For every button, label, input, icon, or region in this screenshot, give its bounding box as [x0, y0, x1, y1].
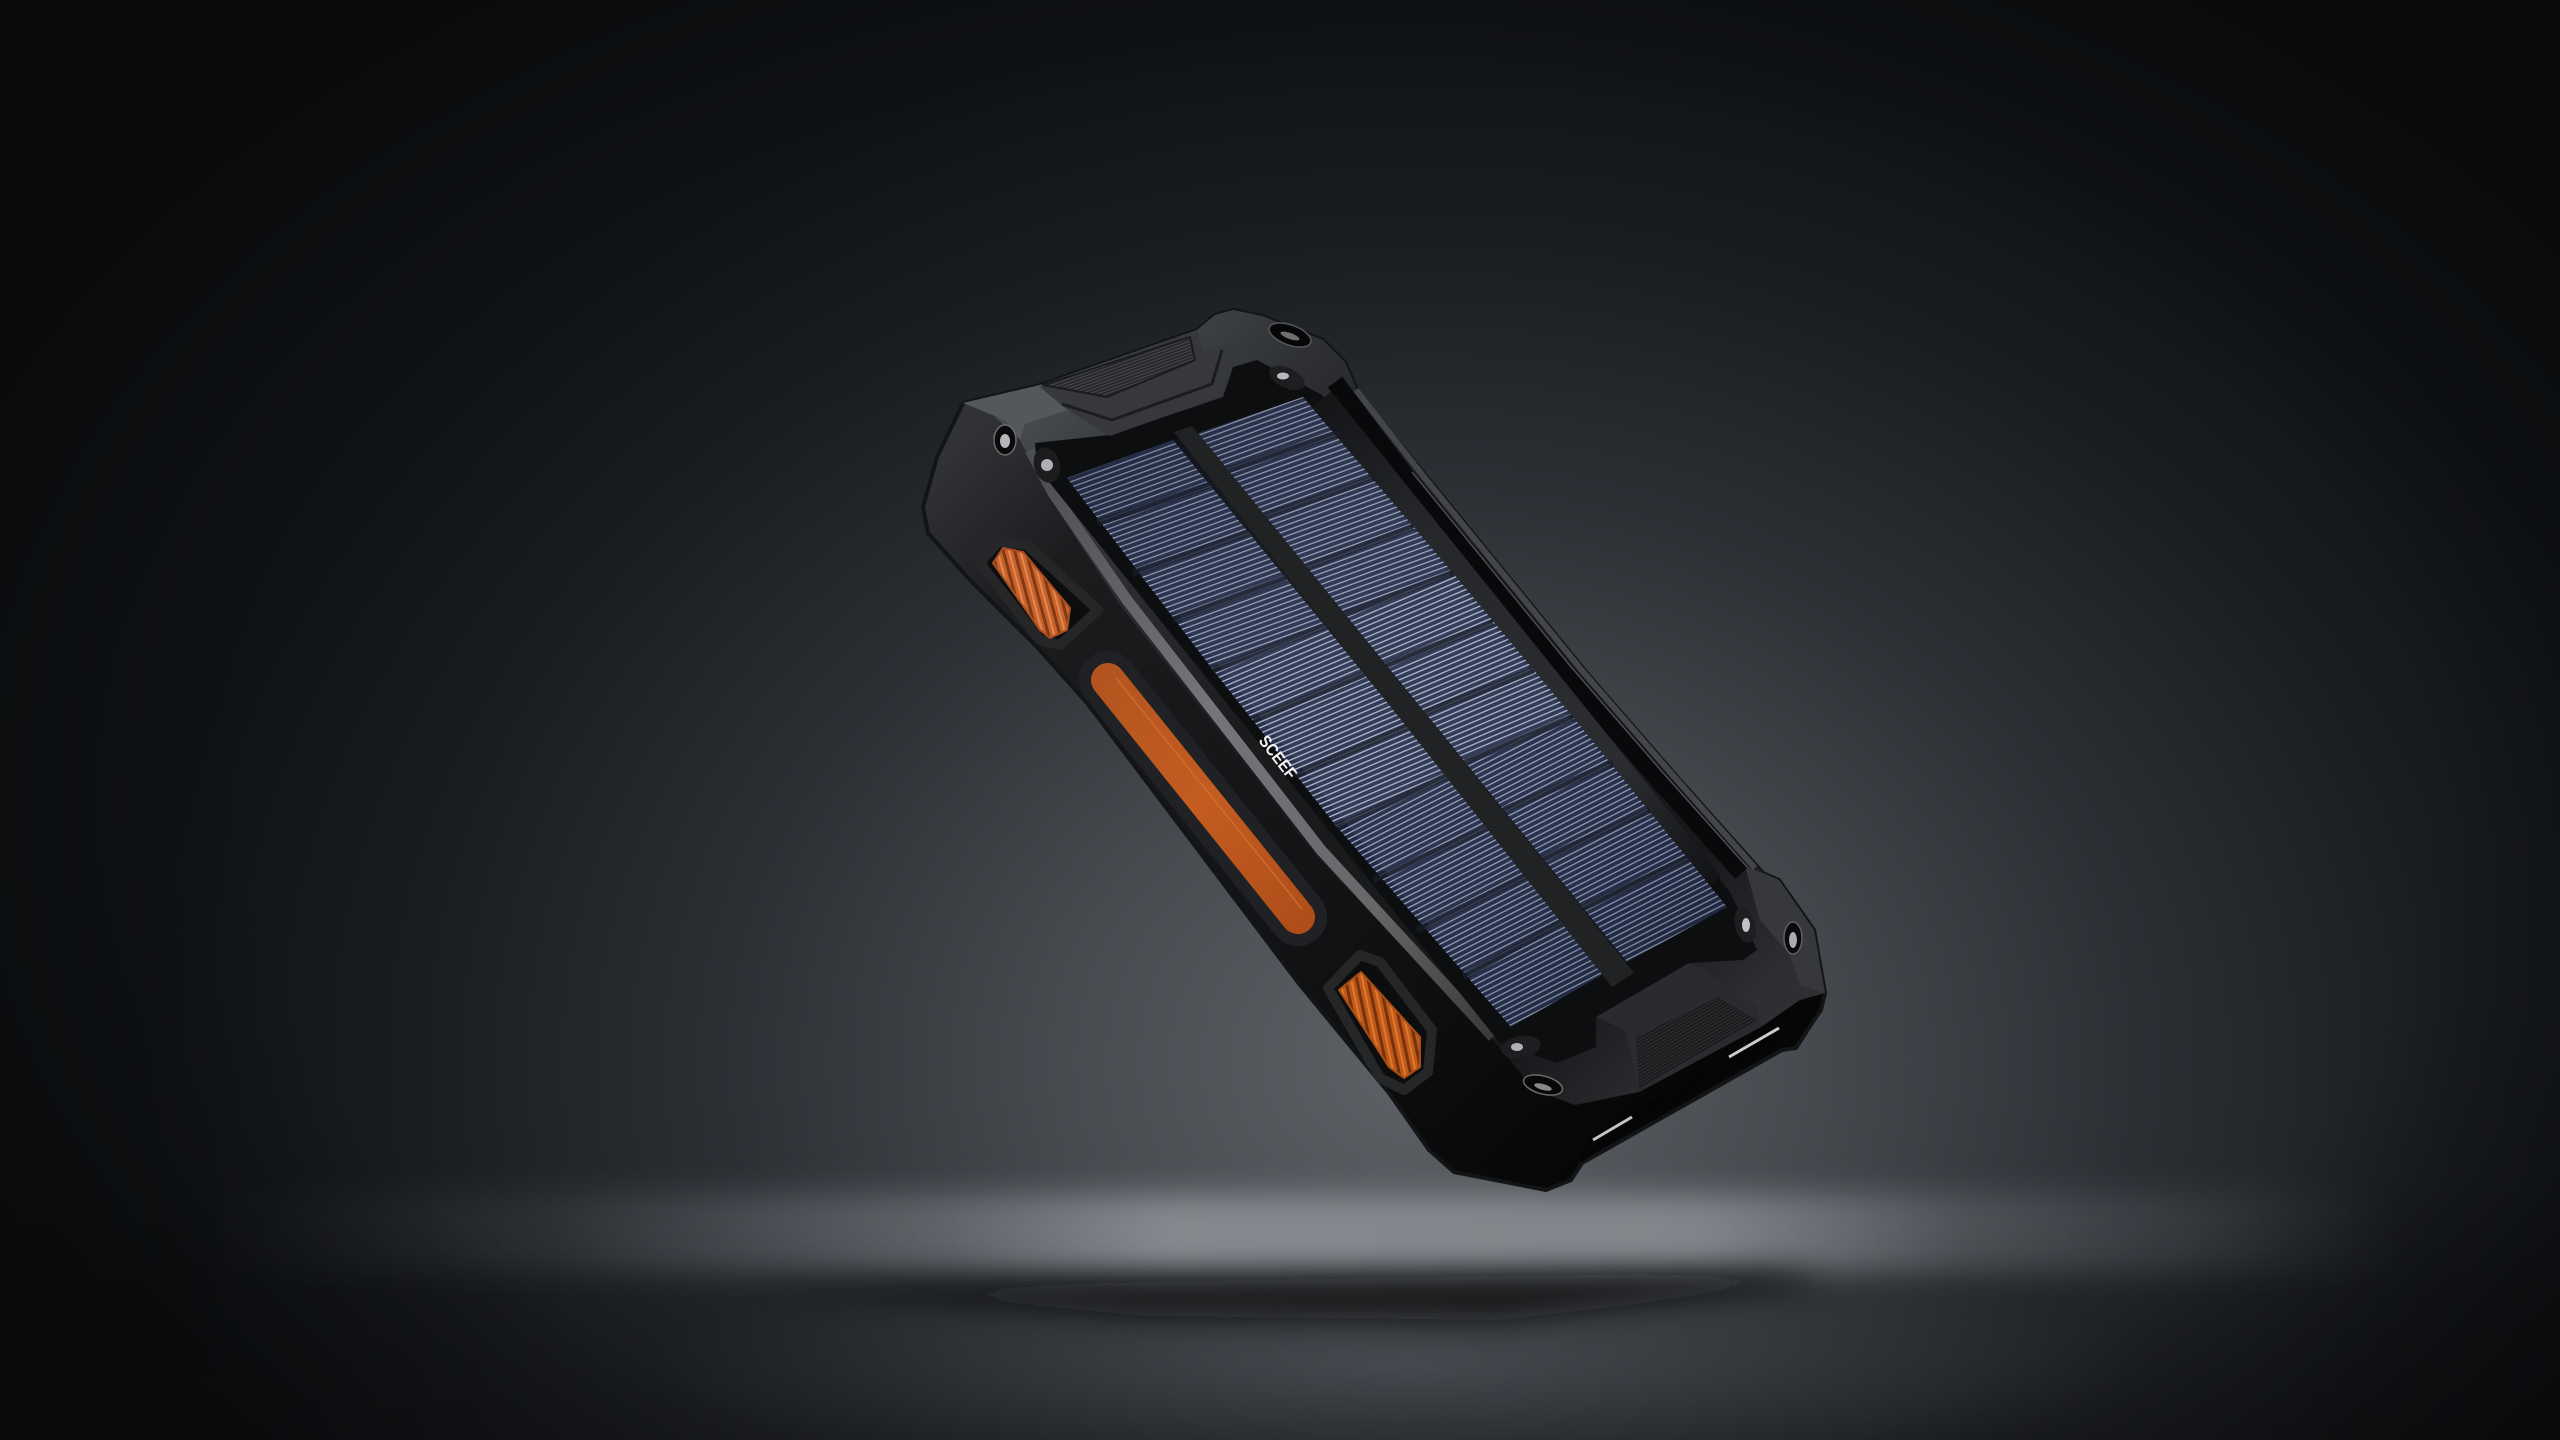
- right panel margin: [1322, 399, 1712, 884]
- top strap chevron lines: [1062, 350, 1222, 420]
- highlight top corner: [963, 385, 1068, 440]
- right black gasket: [1335, 382, 1742, 873]
- top button recess: [980, 542, 1098, 645]
- screw bottom right outer: [1784, 922, 1802, 954]
- top strap bevel: [1040, 330, 1230, 436]
- port: left usb: [1582, 1097, 1664, 1160]
- inner black bed: [1035, 360, 1757, 1063]
- screw top left outer: [994, 425, 1016, 455]
- bottom strap frame: [1596, 963, 1761, 1092]
- screw top left inner: [1030, 444, 1064, 486]
- right outer grey strip: [1356, 390, 1755, 868]
- screw bottom left inner: [1499, 1033, 1543, 1061]
- highlight bottom right corner: [1745, 866, 1825, 993]
- power bank device: [923, 310, 1825, 1190]
- top strap mesh vent: [1043, 337, 1195, 397]
- floor shadow: [760, 1272, 1830, 1320]
- port: micro: [1671, 1070, 1707, 1103]
- port: right usb: [1716, 1025, 1782, 1080]
- screws: [994, 318, 1802, 1099]
- bottom button recess: [1328, 955, 1432, 1090]
- hole top right outer: [1266, 318, 1314, 352]
- solar panel: right column: [1198, 397, 1727, 962]
- screw top right inner: [1266, 361, 1308, 395]
- central divider between solar columns: [1174, 426, 1634, 987]
- hole bottom left outer: [1521, 1071, 1565, 1099]
- long orange bar: [1108, 680, 1298, 917]
- left column cell dividers: [1097, 485, 1565, 977]
- screw bottom right inner: [1731, 905, 1759, 945]
- left rim highlight: [1030, 450, 1493, 1037]
- panel sheen: [1067, 397, 1727, 1027]
- brand label: SCEEF: [1255, 732, 1301, 783]
- bottom strap leather pad: [1636, 997, 1757, 1090]
- bottom orange ribbed button: [1339, 972, 1420, 1078]
- right column cell dividers: [1228, 432, 1690, 908]
- device outer body: [923, 310, 1825, 1190]
- right gasket highlight: [1412, 472, 1748, 868]
- long button recess: [1108, 680, 1298, 917]
- solar panel: left column: [1067, 440, 1607, 1027]
- long bar inner bevel: [1116, 678, 1302, 909]
- top orange ribbed button: [993, 548, 1070, 638]
- device top face frame: [963, 310, 1825, 1105]
